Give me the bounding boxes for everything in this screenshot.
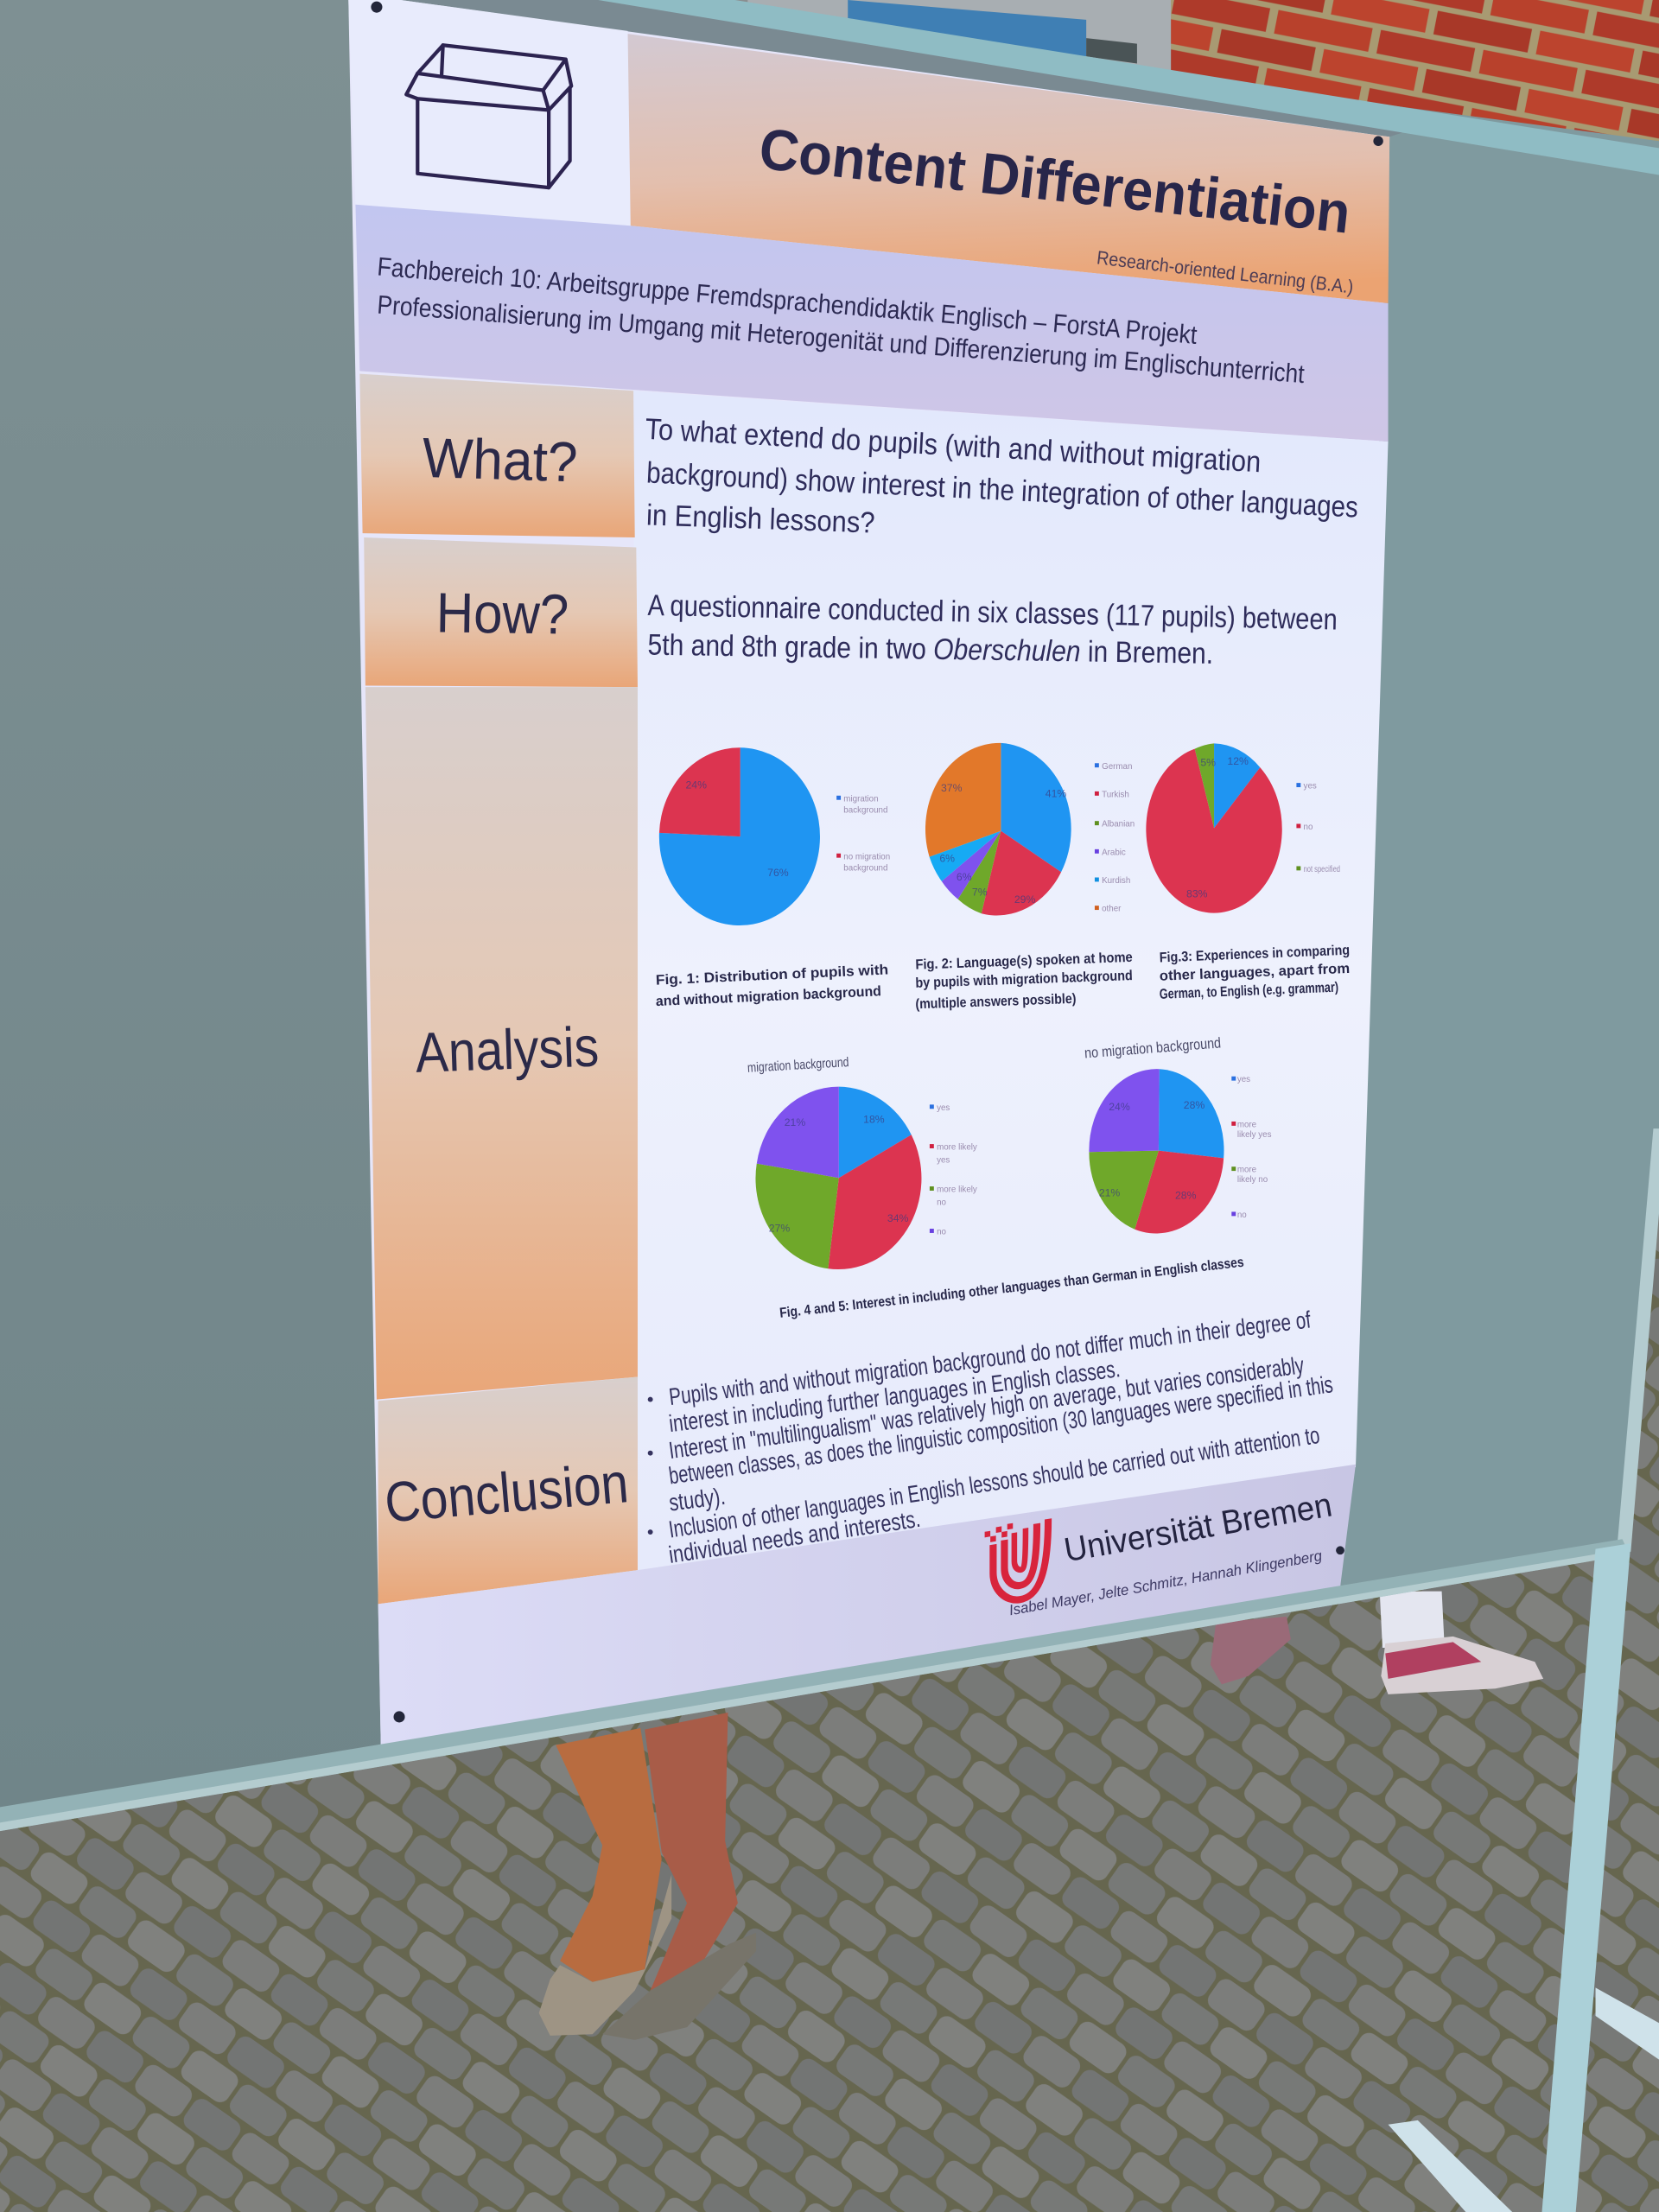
- caption: Fig 1: Fig. 1: Distribution of pupils with: [656, 962, 888, 988]
- legend: Fig 5: [1231, 1075, 1272, 1220]
- pie chart: Fig 3: 12%: [1227, 755, 1249, 767]
- person legs and shoes: [539, 1713, 756, 2040]
- conclusion text: between classes, as does the linguistic composition (30 languages were specified in this: [667, 1370, 1334, 1489]
- display stand leg: [1541, 1543, 1630, 2212]
- pie chart: Fig 4: 34%: [887, 1212, 909, 1224]
- department line 1: Fachbereich 10: Arbeitsgruppe Fremdsprachendidaktik Englisch – ForstA Projekt: [376, 252, 1198, 350]
- pie chart: Fig 4: 18%: [863, 1114, 885, 1126]
- legend: Fig 1: background: [843, 805, 887, 815]
- caption: Fig 2: [915, 950, 1133, 1012]
- pie chart: Fig 5: 28%: [1175, 1190, 1197, 1202]
- heading: How?: How?: [435, 581, 569, 646]
- caption: Fig 3: Fig.3: Experiences in comparing: [1159, 943, 1350, 965]
- caption: Fig 3: other languages, apart from: [1159, 961, 1350, 984]
- chart title: no migration background: no migration background: [1084, 1033, 1222, 1061]
- legend: Fig 5: likely no: [1237, 1175, 1268, 1185]
- pie chart: Fig 2: 37%: [941, 782, 963, 794]
- how text line 2: 5th and 8th grade in two Oberschulen in Bremen.: [647, 629, 1213, 671]
- pie chart: Fig 2: 29%: [1014, 893, 1035, 906]
- conclusion text: Interest in "multilingualism" was relatively high on average, but varies considerably: [667, 1351, 1306, 1464]
- conclusion text: Pupils with and without migration background do not differ much in their degree of: [668, 1306, 1313, 1410]
- pie chart: Fig 1: [659, 747, 820, 925]
- display board left side: [0, 0, 395, 1813]
- pie chart: Fig 5: 21%: [1099, 1186, 1120, 1198]
- caption: Fig 2: by pupils with migration background: [915, 968, 1133, 991]
- legend: Fig 4: no: [937, 1228, 947, 1237]
- panel: department band: [355, 205, 1389, 442]
- shadowed board strip above poster: [401, 0, 1411, 137]
- panel: title banner: [628, 34, 1389, 303]
- legend: Fig 3: [1296, 782, 1340, 874]
- legend: Fig 2: Turkish: [1102, 790, 1129, 799]
- heading: What?: What?: [422, 426, 579, 493]
- pie chart: Fig 5: 28%: [1184, 1099, 1205, 1111]
- logo text: Universität Bremen: Universität Bremen: [1061, 1486, 1335, 1569]
- legend: Fig 2: Albanian: [1102, 820, 1135, 830]
- legend: Fig 3: yes: [1304, 782, 1317, 791]
- poster: [348, 0, 1389, 1749]
- panel: footer band: [378, 1465, 1356, 1749]
- what text line 1: To what extend do pupils (with and without migration: [645, 413, 1262, 479]
- conclusion text: individual needs and interests.: [667, 1505, 922, 1568]
- pie chart: Fig 4: [755, 1087, 921, 1269]
- legend: Fig 5: no: [1237, 1211, 1247, 1220]
- legend: Fig 3: no: [1304, 823, 1313, 832]
- legend: Fig 1: [836, 794, 890, 873]
- what text line 3: in English lessons?: [645, 499, 875, 540]
- heading: Analysis: Analysis: [415, 1014, 600, 1084]
- brick wall: [1166, 0, 1659, 156]
- panel: How: [364, 537, 638, 687]
- department line 2: Professionalisierung im Umgang mit Heterogenität und Differenzierung im Englischunterricht: [376, 291, 1306, 389]
- legend: Fig 4: no: [937, 1198, 947, 1207]
- pie chart: Fig 3: 83%: [1186, 887, 1208, 899]
- caption: Fig 3: German, to English (e.g. grammar): [1159, 980, 1338, 1002]
- board top frame: [598, 0, 1659, 175]
- window: [536, 0, 1171, 85]
- stand foot left: [1389, 2120, 1512, 2212]
- stand foot right: [1596, 1987, 1659, 2060]
- legend: Fig 4: yes: [937, 1103, 950, 1113]
- caption: Fig 4 and 5: Fig. 4 and 5: Interest in including other languages than German in English classes: [779, 1255, 1244, 1321]
- legend: Fig 2: other: [1102, 905, 1122, 914]
- legend: Fig 5: likely yes: [1237, 1130, 1272, 1140]
- legend: Fig 1: no migration: [843, 852, 890, 861]
- legend: Fig 3: not specified: [1304, 865, 1340, 874]
- pie chart: Fig 5: 24%: [1109, 1101, 1130, 1113]
- pie chart: Fig 2: 7%: [972, 887, 988, 899]
- poster base sheet: [348, 0, 1389, 1749]
- caption: Fig 3: [1159, 943, 1350, 1002]
- pie chart: Fig 2: 6%: [939, 853, 955, 865]
- legend: Fig 2: [1095, 762, 1135, 914]
- what text line 2: background) show interest in the integration of other languages: [645, 456, 1359, 524]
- pins: [371, 2, 1383, 1722]
- legend: Fig 1: background: [843, 863, 887, 873]
- board bottom frame: [0, 1539, 1630, 1831]
- legend: Fig 2: Kurdish: [1102, 876, 1130, 886]
- conclusion text: [667, 1306, 1334, 1568]
- legend: Fig 2: German: [1102, 762, 1132, 772]
- heading: Conclusion: Conclusion: [382, 1451, 631, 1535]
- icon: open box: [406, 45, 571, 188]
- pie chart: Fig 2: 6%: [957, 871, 972, 883]
- pie chart: Fig 3: [1146, 743, 1282, 913]
- panel: What: [359, 374, 635, 537]
- legend: Fig 5: more: [1237, 1166, 1256, 1175]
- title: Content Differentiation: [756, 117, 1354, 246]
- logo: Universität Bremen emblem: [985, 1517, 1048, 1605]
- conclusion text: interest in including further languages in English classes.: [667, 1355, 1122, 1437]
- panel: Analysis: [365, 687, 638, 1400]
- pie chart: Fig 2: [925, 743, 1071, 915]
- people behind board: sneakers: [1211, 1592, 1543, 1694]
- caption: Fig 2: (multiple answers possible): [915, 991, 1077, 1012]
- pie chart: Fig 1: 76%: [767, 867, 789, 879]
- caption: Fig 1: and without migration background: [656, 983, 881, 1009]
- caption: Fig 1: [656, 962, 888, 1009]
- panel: main white content: [633, 391, 1389, 1573]
- panel: header white box with icon: [348, 0, 631, 226]
- caption: Fig 2: Fig. 2: Language(s) spoken at home: [915, 950, 1133, 973]
- pie chart: Fig 2: 41%: [1046, 787, 1066, 799]
- pie chart: Fig 5: [1089, 1069, 1224, 1234]
- legend: Fig 1: migration: [843, 794, 879, 804]
- authors: Isabel Mayer, Jelte Schmitz, Hannah Klingenberg: [1007, 1547, 1324, 1618]
- legend: Fig 4: more likely: [937, 1185, 977, 1195]
- legend: Fig 2: Arabic: [1102, 848, 1126, 857]
- pie chart: Fig 3: 5%: [1200, 757, 1216, 769]
- chart title: migration background: migration background: [747, 1055, 849, 1076]
- pie chart: Fig 4: 27%: [769, 1222, 790, 1234]
- legend: Fig 5: yes: [1237, 1075, 1250, 1084]
- how text line 1: A questionnaire conducted in six classes (117 pupils) between: [647, 589, 1338, 637]
- board right frame: [1617, 1128, 1659, 1552]
- legend: Fig 4: more likely: [937, 1143, 977, 1153]
- legend: Fig 5: more: [1237, 1120, 1256, 1129]
- pie chart: Fig 1: 24%: [685, 779, 707, 791]
- conclusion text: study).: [667, 1483, 727, 1516]
- subtitle: Research-oriented Learning (B.A.): [1096, 246, 1355, 298]
- pie chart: Fig 4: 21%: [785, 1116, 805, 1128]
- legend: Fig 4: yes: [937, 1155, 950, 1165]
- conclusion text: Inclusion of other languages in English lessons should be carried out with attention to: [667, 1421, 1321, 1543]
- conclusion bullets: [648, 1397, 653, 1535]
- legend: Fig 4: [930, 1103, 977, 1237]
- panel: Conclusion: [378, 1376, 638, 1604]
